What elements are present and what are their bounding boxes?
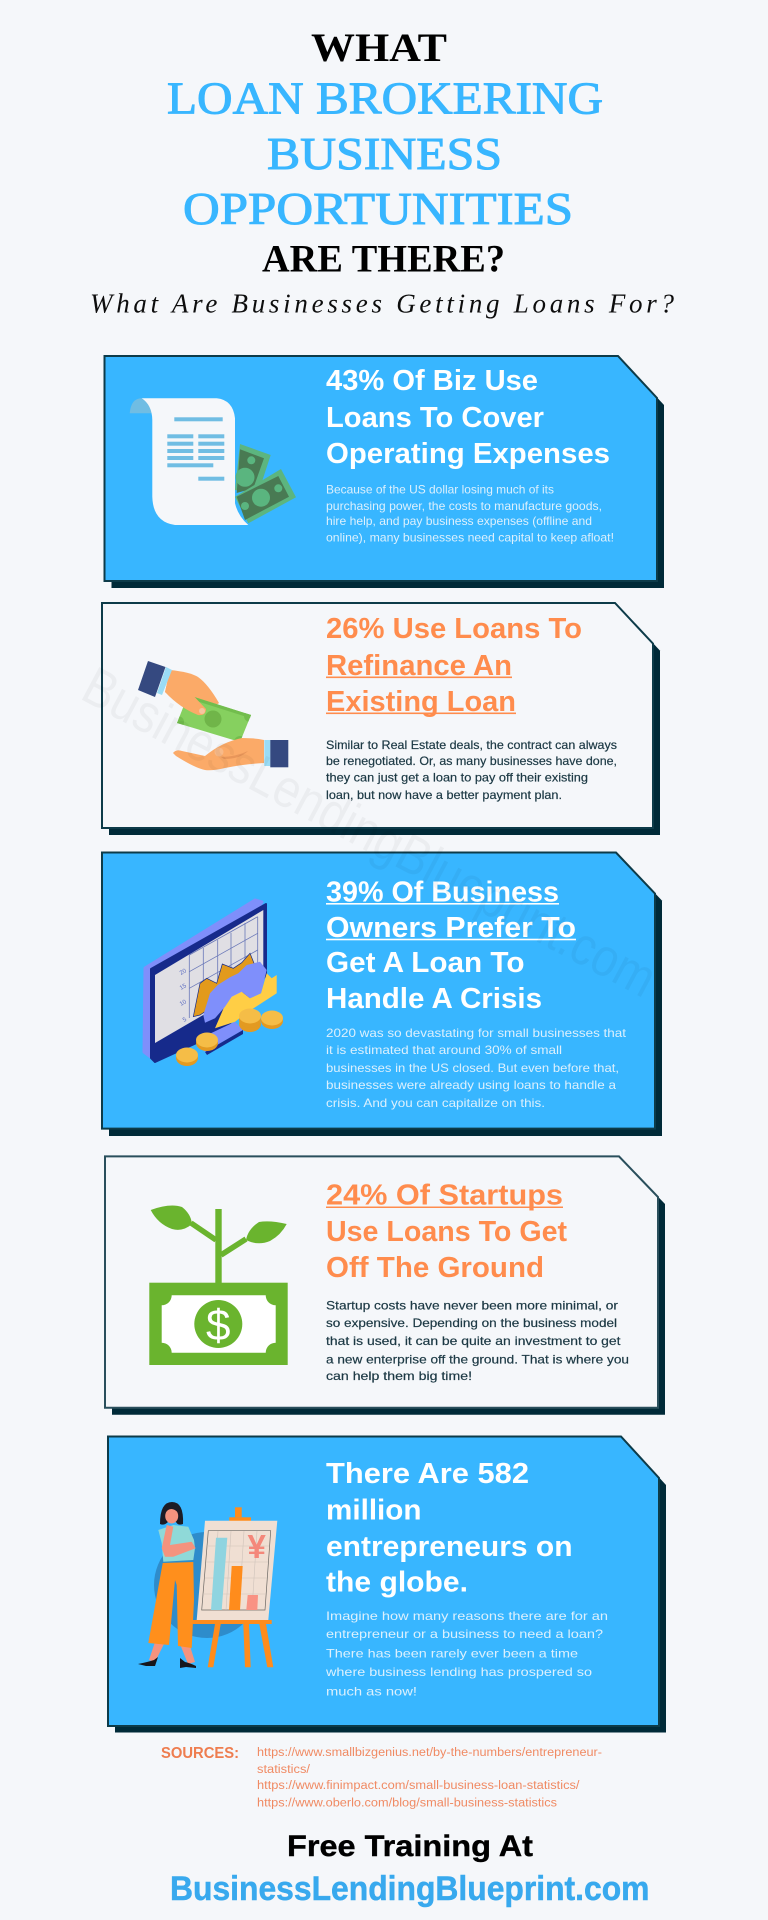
sources: SOURCES: [161,1745,239,1762]
title: OPPORTUNITIES [183,183,573,234]
body text: loan, but now have a better payment plan. [326,788,562,802]
heading [326,1458,572,1599]
heading: entrepreneurs on [326,1531,572,1563]
body text: businesses were already using loans to handle a [326,1078,616,1092]
icon: receipt and cash [130,398,296,525]
watermark: BusinessLendingBlueprint.com [73,656,666,1009]
icon: woman with easel chart [138,1502,277,1668]
title: LOAN BROKERING [167,73,603,124]
body text: Because of the US dollar losing much of its [326,483,554,497]
icon: plant growing from banknote [149,1206,288,1365]
panel: refinance [102,603,660,835]
sources: https://www.finimpact.com/small-business-loan-statistics/ [257,1780,580,1792]
heading: 26% Use Loans To [326,613,582,645]
body text: so expensive. Depending on the business model [326,1316,617,1330]
title: BUSINESS [267,128,502,179]
heading: 24% Of Startups [326,1180,563,1212]
body text [326,738,617,802]
heading: Existing Loan [326,686,516,718]
sources: https://www.smallbizgenius.net/by-the-numbers/entrepreneur- [257,1747,602,1759]
infographic canvas [82,34,674,1908]
heading: Operating Expenses [326,438,610,470]
chart axis labels [179,968,188,1024]
body text: a new enterprise off the ground. That is where you [326,1352,629,1366]
heading: There Are 582 [326,1458,529,1490]
sources: statistics/ [257,1764,311,1776]
body text [326,1299,629,1383]
title: ARE THERE? [262,238,505,281]
heading: Off The Ground [326,1252,544,1284]
heading: million [326,1495,422,1527]
heading [326,365,610,470]
heading [326,876,576,1015]
body text: that is used, it can be quite an investment to get [326,1334,621,1348]
body text: it is estimated that around 30% of small [326,1043,562,1057]
heading: Get A Loan To [326,947,524,979]
title [167,25,603,281]
icon: chart monitor with coins [144,900,283,1066]
chart axis labels: 20 [179,968,188,977]
call to action: BusinessLendingBlueprint.com [170,1870,650,1908]
body text: Startup costs have never been more minimal, or [326,1299,618,1313]
heading: 43% Of Biz Use [326,365,538,397]
body text: entrepreneur or a business to need a loan? [326,1627,603,1641]
panel: startups [105,1156,665,1415]
icon: woman with easel chart: ¥ [248,1528,267,1565]
chart axis labels: 5 [182,1017,188,1024]
chart axis labels: 10 [179,999,188,1008]
icon: plant growing from banknote: $ [206,1301,231,1350]
heading [326,1180,567,1284]
body text: businesses in the US closed. But even before that, [326,1061,619,1075]
title: WHAT [311,25,447,70]
body text [326,1026,627,1110]
heading [326,613,582,718]
body text: online), many businesses need capital to keep afloat! [326,530,614,544]
panel: crisis [102,852,662,1136]
heading: Refinance An [326,650,512,682]
body text: they can just get a loan to pay off their existing [326,770,588,784]
body text: can help them big time! [326,1369,472,1383]
body text: be renegotiated. Or, as many businesses have done, [326,754,617,768]
body text: Similar to Real Estate deals, the contract can always [326,738,617,752]
call to action: Free Training At [287,1830,533,1863]
body text: hire help, and pay business expenses (offline and [326,514,592,528]
sources [161,1745,602,1810]
heading: Use Loans To Get [326,1216,567,1248]
heading: the globe. [326,1567,468,1599]
body text: There has been rarely ever been a time [326,1646,578,1660]
icon: hands exchanging cash [138,661,288,770]
body text: Imagine how many reasons there are for an [326,1609,608,1623]
sources: https://www.oberlo.com/blog/small-business-statistics [257,1798,557,1810]
body text: crisis. And you can capitalize on this. [326,1096,545,1110]
panel: operating expenses [104,356,664,588]
body text [325,1609,608,1699]
body text: where business lending has prospered so [325,1665,592,1679]
heading: Handle A Crisis [326,983,542,1015]
body text [326,483,614,544]
chart axis labels: 15 [179,983,188,992]
panel: entrepreneurs [108,1436,666,1732]
call to action [170,1830,650,1908]
heading: 39% Of Business [326,876,559,908]
body text: much as now! [326,1685,417,1699]
subtitle: What Are Businesses Getting Loans For? [90,289,674,319]
body text: 2020 was so devastating for small businesses that [326,1026,627,1040]
body text: purchasing power, the costs to manufacture goods, [326,499,602,513]
heading: Loans To Cover [326,402,544,434]
heading: Owners Prefer To [326,912,576,944]
